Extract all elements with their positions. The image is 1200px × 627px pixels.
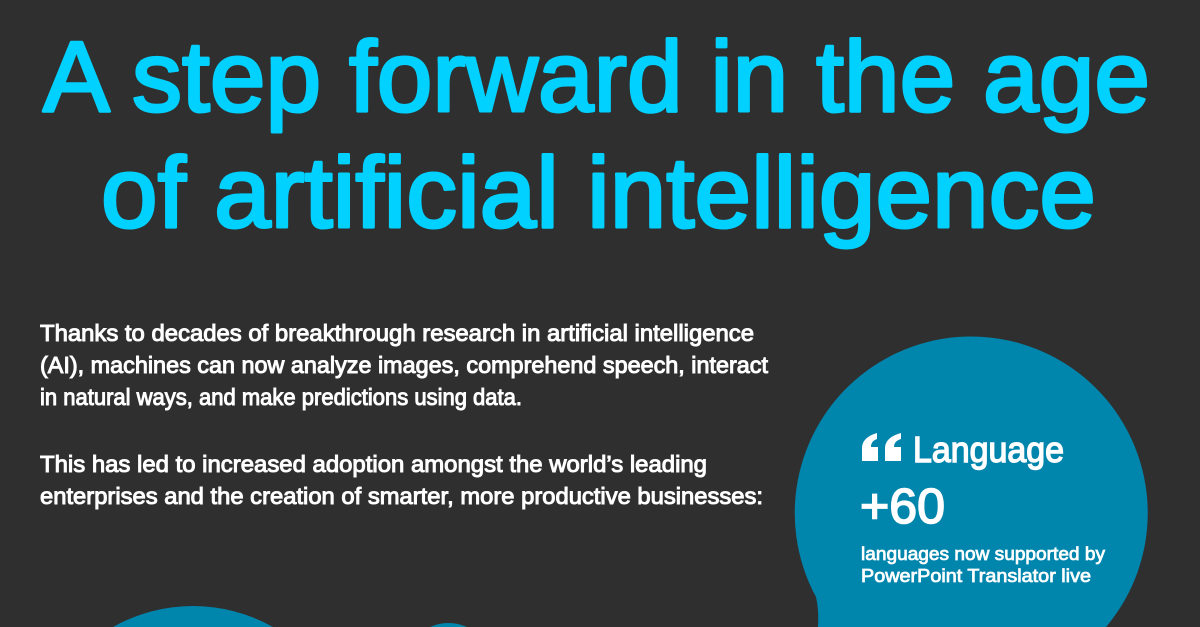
icon: quotation marks <box>862 433 901 461</box>
intro text block: in natural ways, and make predictions using data. <box>40 384 522 410</box>
stat description: languages now supported by <box>861 544 1105 564</box>
stat: +60: +60 <box>860 480 945 534</box>
title: of artificial intelligence <box>101 137 1096 249</box>
intro text block: Thanks to decades of breakthrough research in artificial intelligence <box>40 320 754 346</box>
intro text block <box>40 320 768 509</box>
heading: Language: Language <box>913 429 1064 470</box>
intro text block: (AI), machines can now analyze images, comprehend speech, interact <box>40 352 768 378</box>
intro text block: This has led to increased adoption amongst the world’s leading <box>40 451 707 477</box>
panel: small bottom circle <box>430 623 467 627</box>
intro text block: enterprises and the creation of smarter, more productive businesses: <box>40 483 763 509</box>
title: A step forward in the age <box>43 21 1150 133</box>
panel: language speech bubble <box>795 337 1148 627</box>
title <box>43 21 1150 249</box>
stat description: PowerPoint Translator live <box>861 566 1091 586</box>
stat description <box>861 544 1105 586</box>
panel: bottom-left circle <box>113 606 273 627</box>
